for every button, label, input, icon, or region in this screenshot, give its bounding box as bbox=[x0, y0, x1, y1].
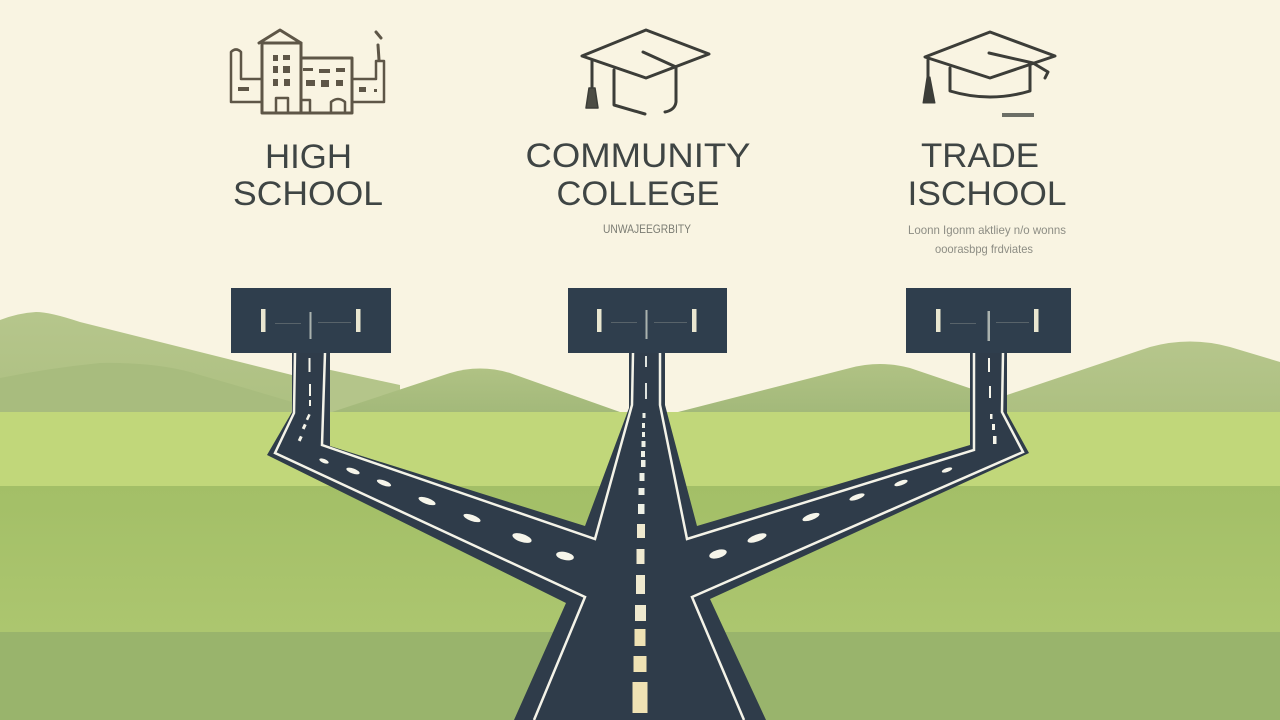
road sign: right bbox=[906, 288, 1071, 353]
left road dashes bbox=[298, 358, 575, 562]
centre road dashes bbox=[632, 356, 648, 713]
branching road bbox=[267, 353, 1029, 720]
road surface bbox=[267, 353, 1029, 720]
label: community college: COMMUNITY bbox=[526, 137, 750, 175]
road edge lines bbox=[275, 353, 1023, 720]
caption: trade school: ooorasbpg frdviates bbox=[935, 242, 1033, 256]
label: community college bbox=[526, 137, 750, 213]
label: trade school: TRADE bbox=[921, 137, 1039, 175]
label: trade school bbox=[908, 137, 1066, 213]
label: trade school: ISCHOOL bbox=[908, 175, 1066, 213]
hills bbox=[0, 312, 1280, 412]
icon: school building bbox=[231, 30, 384, 113]
label: high school: HIGH bbox=[265, 138, 352, 176]
grass bands bbox=[0, 412, 1280, 720]
caption: trade school bbox=[908, 223, 1066, 256]
label: community college: COLLEGE bbox=[556, 175, 720, 213]
icon: graduation cap right bbox=[923, 32, 1055, 117]
caption: trade school: Loonn Igonm aktliey n/o wonns bbox=[908, 223, 1066, 237]
road sign: centre bbox=[568, 288, 727, 353]
road sign: left bbox=[231, 288, 391, 353]
label: high school: SCHOOL bbox=[233, 175, 383, 213]
caption: community college: UNWAJEEGRBITY bbox=[603, 222, 691, 236]
icon: graduation cap centre bbox=[582, 30, 709, 114]
label: high school bbox=[233, 138, 383, 213]
right road dashes bbox=[708, 358, 996, 560]
